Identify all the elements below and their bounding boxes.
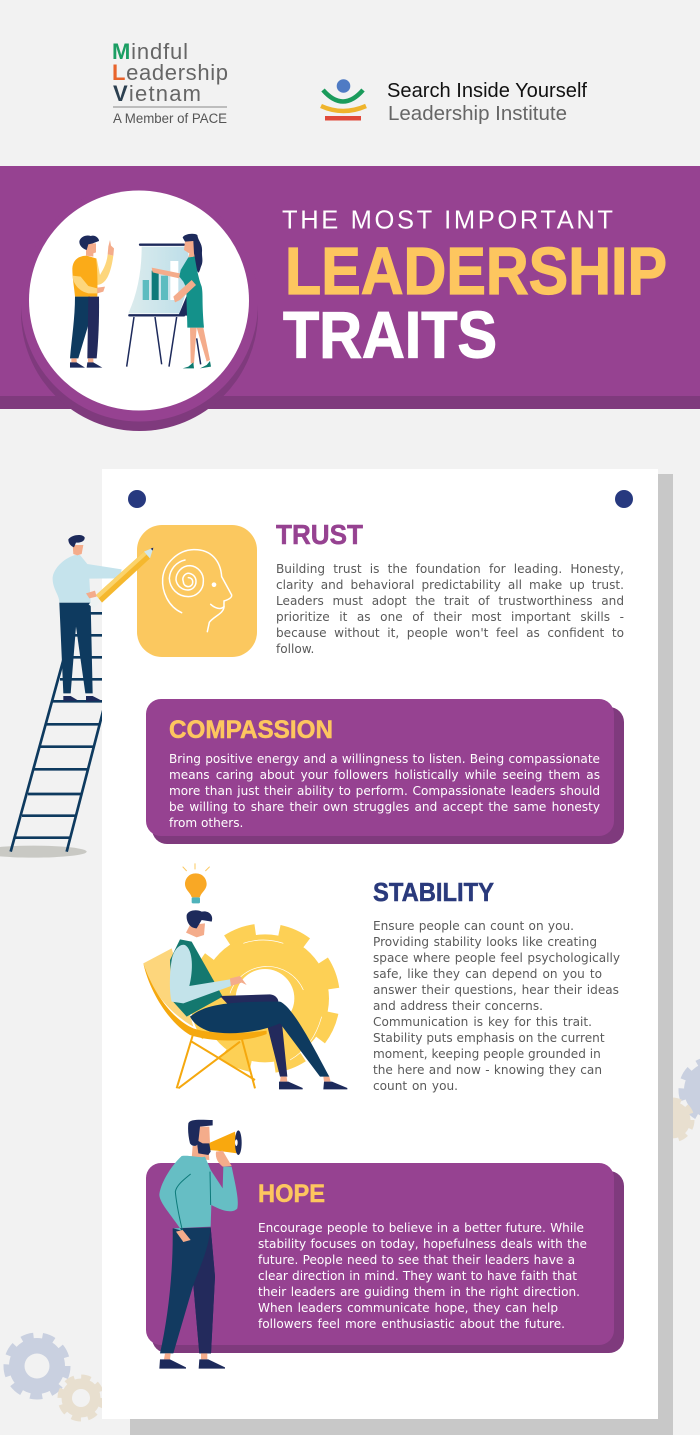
text: compassion body: from others. [169, 816, 243, 830]
icon: lightbulb [183, 863, 210, 903]
text: compassion body: more than just their ability to perform. Compassionate leaders should [169, 784, 600, 798]
card shadow [130, 474, 673, 1435]
text: compassion body: means caring about your followers holistically while seeing them as [169, 768, 600, 782]
text: hope body: Encourage people to believe in a better future. While [258, 1221, 584, 1235]
logo: Mindful Leadership Vietnam: Mindful [112, 39, 188, 64]
text: trust body [276, 562, 624, 656]
text: hope body: followers feel more enthusiastic about the future. [258, 1317, 565, 1331]
logo: Search Inside Yourself Leadership Institute: Search Inside Yourself [387, 80, 587, 102]
text: compassion body: be willing to share their own struggles and accept the same honesty [169, 800, 600, 814]
text: stability body: Stability puts emphasis on the current [373, 1031, 605, 1045]
text: compassion body [169, 752, 600, 830]
text: stability body: and address their concerns. [373, 999, 543, 1013]
text: stability body: the here and now - knowing they can [373, 1063, 602, 1077]
text: stability body: count on you. [373, 1079, 458, 1093]
text: trust body: Leaders must adopt the trait of trustworthiness and [276, 594, 624, 608]
text: hope body: stability focuses on today, hopefulness deals with the [258, 1237, 587, 1251]
illustration: man with megaphone [159, 1120, 242, 1369]
logo: Mindful Leadership Vietnam: Vietnam [113, 81, 201, 106]
gears: background right [652, 1060, 700, 1140]
logo: Search Inside Yourself Leadership Institute [321, 79, 587, 125]
text: stability body: Ensure people can count on you. [373, 919, 574, 933]
text: trust body: follow. [276, 642, 314, 656]
logo: Search Inside Yourself Leadership Institute: Leadership Institute [388, 103, 567, 125]
text: stability body: Providing stability looks like creating [373, 935, 597, 949]
logo: Mindful Leadership Vietnam [112, 39, 228, 126]
illustration: man and woman presenting a chart [70, 234, 211, 368]
gears: background left [7, 1336, 102, 1419]
title: TRUST: TRUST [276, 519, 363, 550]
banner title: TRAITS [283, 298, 497, 372]
text: stability body: moment, keeping people grounded in [373, 1047, 601, 1061]
text: hope body: their leaders are guiding them in the right direction. [258, 1285, 580, 1299]
banner title: THE MOST IMPORTANT [282, 206, 613, 234]
text: hope body: When leaders communicate hope, they can help [258, 1301, 558, 1315]
panel: hope [146, 1163, 624, 1353]
text: trust body: prioritize it as one of their most important skills - [276, 610, 624, 624]
icon: head with spiral [137, 525, 257, 657]
text: compassion body: Bring positive energy and a willingness to listen. Being compassionate [169, 752, 600, 766]
illustration: man on chair with gear and lightbulb [143, 903, 360, 1094]
banner [0, 166, 700, 431]
title: STABILITY: STABILITY [373, 877, 494, 907]
text: trust body: Building trust is the foundation for leading. Honesty, [276, 562, 624, 576]
text: stability body: space where people feel psychologically [373, 951, 620, 965]
logo: Mindful Leadership Vietnam: Leadership [112, 60, 228, 85]
ladder [0, 613, 103, 858]
pin left [128, 490, 146, 508]
panel: hope: HOPE [258, 1180, 325, 1208]
illustration: man on ladder with pencil [53, 535, 153, 702]
text: stability body: answer their questions, hear their ideas [373, 983, 619, 997]
text: stability body: safe, like they can depend on you to [373, 967, 602, 981]
logo: Mindful Leadership Vietnam: A Member of PACE [113, 111, 227, 126]
text: hope body: clear direction in mind. They want to have faith that [258, 1269, 577, 1283]
text: stability body: Communication is key for this trait. [373, 1015, 592, 1029]
text: hope body: future. People need to see that their leaders have a [258, 1253, 575, 1267]
card [102, 469, 658, 1419]
panel: compassion: COMPASSION [169, 716, 333, 744]
text: hope body [258, 1221, 587, 1331]
text: trust body: because without it, people won't feel as confident to [276, 626, 624, 640]
panel: compassion [146, 699, 624, 844]
text: stability body [373, 919, 620, 1093]
pin right [615, 490, 633, 508]
banner title [282, 206, 667, 372]
text: trust body: clarity and behavioral predictability all make up trust. [276, 578, 624, 592]
